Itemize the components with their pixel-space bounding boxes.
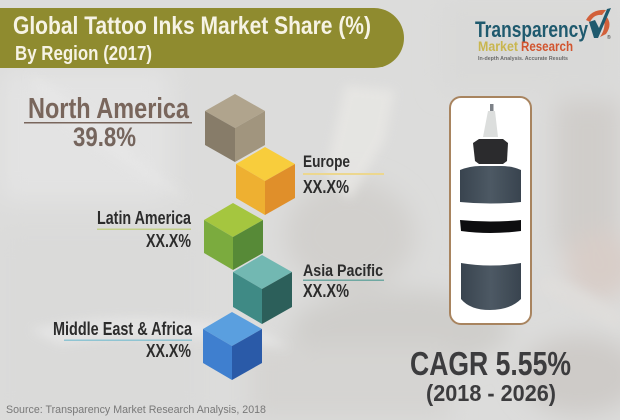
cube: Middle East & Africa bbox=[203, 312, 262, 380]
cube: North America bbox=[205, 94, 265, 162]
logo: Transparency Market Research: Market bbox=[478, 38, 518, 54]
label: North America bbox=[24, 93, 192, 152]
title: Global Tattoo Inks Market Share (%) bbox=[13, 12, 371, 40]
icon: ink bottle bbox=[460, 104, 521, 310]
CAGR bbox=[410, 345, 571, 406]
label: Latin America: Latin America bbox=[97, 208, 192, 228]
label: Middle East & Africa bbox=[53, 319, 193, 361]
label: Latin America: XX.X% bbox=[146, 231, 191, 251]
cube: Latin America bbox=[204, 203, 263, 270]
cube: Asia Pacific bbox=[233, 255, 292, 324]
label: Asia Pacific bbox=[303, 261, 384, 301]
CAGR period: (2018 - 2026) bbox=[426, 380, 556, 406]
label: Europe bbox=[303, 152, 384, 197]
product card: ink bottle bbox=[450, 97, 531, 324]
label: Asia Pacific: XX.X% bbox=[303, 281, 349, 301]
CAGR: CAGR 5.55% bbox=[410, 345, 571, 382]
logo: Transparency Market Research: ® bbox=[607, 34, 611, 41]
title banner bbox=[0, 8, 404, 68]
label: Europe: Europe bbox=[303, 152, 350, 171]
label: Middle East & Africa: Middle East & Africa bbox=[53, 319, 193, 339]
logo: Transparency Market Research bbox=[475, 8, 611, 62]
source: Source: Transparency Market Research Analysis, 2018 bbox=[6, 404, 266, 416]
label: Middle East & Africa: XX.X% bbox=[146, 341, 191, 361]
label: North America: 39.8% bbox=[73, 122, 136, 152]
subtitle: By Region (2017) bbox=[15, 43, 152, 65]
logo: Transparency Market Research: In-depth Analysis. Accurate Results bbox=[478, 56, 568, 62]
cube: Europe bbox=[236, 147, 295, 215]
logo: Transparency Market Research: Transparency bbox=[475, 17, 589, 42]
label: Europe: XX.X% bbox=[303, 177, 349, 197]
label: Asia Pacific: Asia Pacific bbox=[303, 261, 383, 280]
logo: Transparency Market Research: Research bbox=[521, 38, 573, 54]
label: Latin America bbox=[97, 208, 192, 251]
label: North America: North America bbox=[28, 93, 190, 125]
